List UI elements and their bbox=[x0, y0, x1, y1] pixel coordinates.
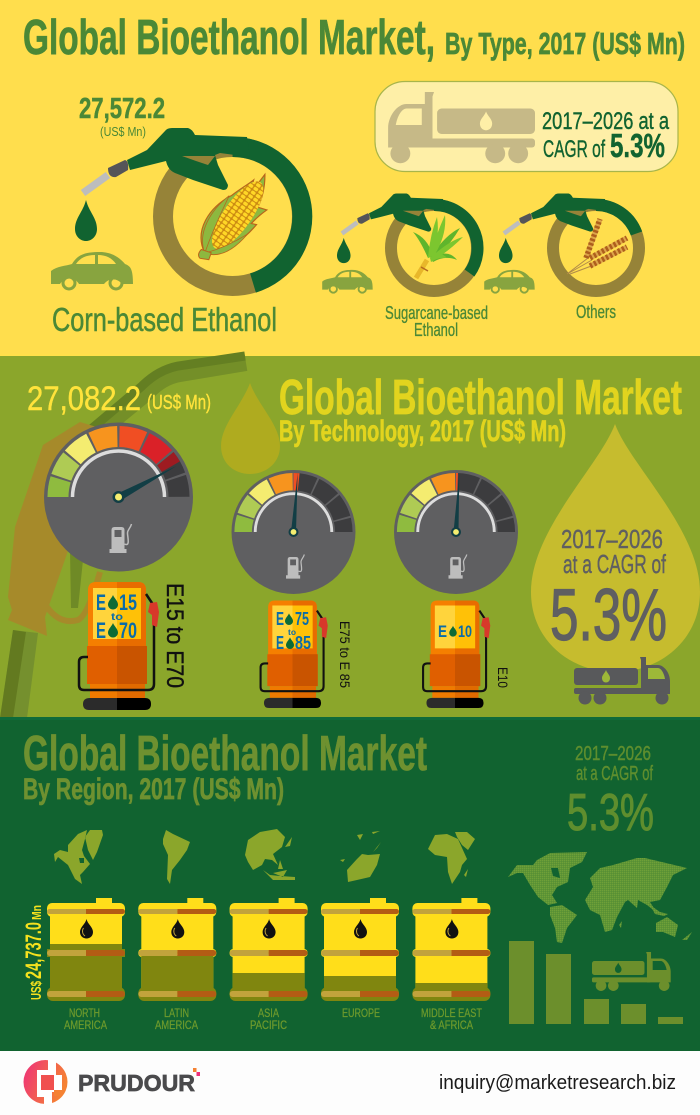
callout: CAGR bbox=[567, 743, 654, 842]
corn value: 27,572.2 bbox=[79, 93, 165, 125]
gauge: E10 bbox=[394, 470, 518, 594]
callout: CAGR: 5.3% bbox=[567, 784, 654, 842]
corn value: (US$ Mn) bbox=[100, 124, 146, 139]
label: sugarcane-based ethanol bbox=[385, 303, 488, 340]
region: Europe bbox=[321, 831, 399, 1020]
fuel pump: E15 to E70: E bbox=[96, 590, 106, 615]
fuel pump: E10: 10 bbox=[458, 622, 472, 641]
region: North America: AMERICA bbox=[64, 1018, 107, 1032]
callout: CAGR drop bbox=[531, 424, 700, 672]
region: Latin America: LATIN bbox=[164, 1006, 189, 1020]
region: North America: NORTH bbox=[69, 1006, 100, 1020]
panel: by region bbox=[0, 720, 700, 1051]
callout: CAGR: at a CAGR of bbox=[576, 763, 653, 785]
region: Europe: EUROPE bbox=[342, 1006, 380, 1020]
contact email: inquiry@marketresearch.biz bbox=[439, 1072, 676, 1094]
fuel pump: E15 to E70: 70 bbox=[119, 618, 137, 643]
fuel pump: E15 to E70: E bbox=[96, 618, 106, 643]
callout: CAGR truck box bbox=[375, 82, 678, 172]
region: Middle East and Africa: MIDDLE EAST bbox=[421, 1006, 483, 1020]
region: Latin America: AMERICA bbox=[155, 1018, 198, 1032]
region: Asia Pacific: PACIFIC bbox=[250, 1018, 287, 1032]
icon: corn bbox=[186, 161, 283, 274]
tech value: 27,082.2 bbox=[27, 380, 141, 418]
chart: sugarcane ring bbox=[322, 193, 478, 293]
fuel pump: E15 to E70: 15 bbox=[119, 590, 137, 615]
label: corn-based ethanol: Corn-based Ethanol bbox=[52, 301, 277, 338]
fuel pump: E75 to E85 bbox=[261, 600, 328, 708]
gauge: E15 to E70 bbox=[44, 422, 193, 572]
title: by technology bbox=[279, 371, 682, 448]
pale fuel drop bbox=[221, 383, 280, 474]
panel: by type bbox=[0, 0, 700, 354]
logo wordmark: PRUDOUR bbox=[78, 1070, 195, 1096]
tech value: (US$ Mn) bbox=[147, 392, 211, 414]
logo bbox=[24, 1060, 200, 1104]
title: by type: Global Bioethanol Market, bbox=[23, 11, 435, 65]
fuel pump: E75 to E85: 85 bbox=[295, 633, 311, 653]
callout: CAGR: 2017–2026 bbox=[575, 743, 651, 765]
fuel pump: E75 to E85: E bbox=[276, 633, 284, 653]
region: Middle East and Africa: & AFRICA bbox=[430, 1018, 473, 1032]
title: by region bbox=[23, 727, 427, 806]
fuel pump: E10 bbox=[423, 600, 490, 708]
vertical value: Mn bbox=[29, 905, 44, 920]
region: Asia Pacific: ASIA bbox=[258, 1006, 279, 1020]
bar chart bbox=[509, 941, 683, 1024]
label: E10: E10 bbox=[495, 667, 511, 688]
fuel pump: E75 to E85: to bbox=[288, 628, 296, 637]
label: sugarcane-based ethanol: Sugarcane-based bbox=[385, 303, 488, 323]
map: south america bbox=[163, 830, 190, 884]
map: asia bbox=[245, 829, 295, 880]
title: by technology: By Technology, 2017 (US$ Mn) bbox=[279, 415, 566, 448]
footer bbox=[0, 1051, 700, 1115]
title: by region: Global Bioethanol Market bbox=[23, 727, 427, 781]
label: E15 to E70: E15 to E70 bbox=[161, 583, 188, 688]
icon: wheat bbox=[567, 219, 627, 274]
panel: by technology bbox=[0, 356, 700, 719]
map: europe bbox=[340, 831, 381, 882]
title: by region: By Region, 2017 (US$ Mn) bbox=[23, 773, 284, 806]
region: Middle East and Africa bbox=[412, 832, 490, 1032]
gauge: E75 to E85 bbox=[232, 470, 355, 594]
map: africa bbox=[428, 832, 475, 884]
icon: sugarcane bbox=[413, 215, 463, 278]
background nozzle illustration bbox=[0, 356, 246, 718]
region: Asia Pacific bbox=[230, 829, 308, 1032]
chart: others ring bbox=[484, 193, 639, 293]
fuel pump: E15 to E70: to bbox=[111, 612, 123, 623]
callout: CAGR truck box: 5.3% bbox=[610, 127, 665, 164]
label: sugarcane-based ethanol: Ethanol bbox=[414, 320, 458, 340]
dotted world map bbox=[508, 852, 692, 943]
fuel pump: E75 to E85: 75 bbox=[295, 609, 309, 629]
fuel pump: E15 to E70 bbox=[79, 582, 159, 710]
fuel pump: E10: E bbox=[438, 622, 447, 641]
corn value bbox=[79, 93, 165, 139]
vertical value bbox=[21, 905, 46, 1000]
icon: tanker truck bbox=[574, 657, 670, 704]
map: north america bbox=[54, 830, 103, 884]
callout: CAGR truck box: CAGR of bbox=[543, 136, 605, 163]
label: E75 to E85: E75 to E 85 bbox=[337, 621, 353, 688]
callout: CAGR drop: 2017–2026 bbox=[561, 524, 663, 554]
vertical value: US$ bbox=[28, 981, 45, 1000]
region: North America bbox=[47, 830, 125, 1032]
label: others: Others bbox=[576, 302, 616, 322]
fuel pump: E75 to E85: E bbox=[276, 609, 284, 629]
vertical value: 24,737.0 bbox=[21, 922, 46, 979]
region: Latin America bbox=[138, 830, 216, 1032]
icon: truck bbox=[592, 952, 671, 991]
chart: corn-based ring bbox=[51, 128, 302, 289]
